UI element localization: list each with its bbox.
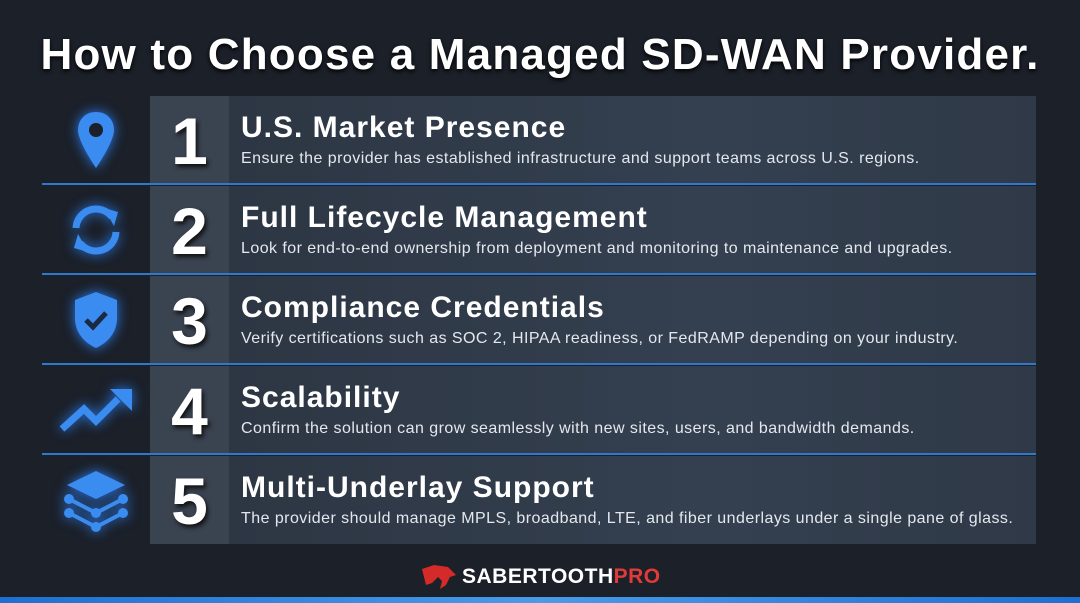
text 1: Ensure the provider has established infrastructure and support teams across U.S. regions. xyxy=(241,150,920,167)
number 2: 2 xyxy=(171,194,208,268)
bottom bar xyxy=(0,597,1080,603)
text 3: Compliance Credentials xyxy=(241,291,605,324)
number 4 xyxy=(150,366,229,454)
row 3 xyxy=(65,276,1036,363)
number 2 xyxy=(150,186,229,274)
text 4 xyxy=(229,366,1036,454)
text 2: Full Lifecycle Management xyxy=(241,201,648,234)
title: How to Choose a Managed SD-WAN Provider. xyxy=(40,30,1040,79)
number 4: 4 xyxy=(171,374,208,448)
number 1 xyxy=(150,96,229,184)
number 1: 1 xyxy=(171,104,208,178)
number 5: 5 xyxy=(171,464,208,538)
row 1 xyxy=(69,96,1036,183)
icon: sabertooth head xyxy=(422,565,456,589)
text 2 xyxy=(229,186,1036,274)
text 5: The provider should manage MPLS, broadband, LTE, and fiber underlays under a single pane of glass. xyxy=(241,510,1013,527)
text 1: U.S. Market Presence xyxy=(241,111,566,144)
number 5 xyxy=(150,456,229,544)
number 3 xyxy=(150,276,229,364)
icon: trend arrow xyxy=(54,380,142,438)
icon: layers xyxy=(56,463,136,540)
row 4 xyxy=(54,366,1036,453)
text 5: Multi-Underlay Support xyxy=(241,471,595,504)
text 5 xyxy=(229,456,1036,544)
row 2 xyxy=(65,186,1036,273)
logo: SABERTOOTHPRO xyxy=(462,565,661,588)
text 3 xyxy=(229,276,1036,364)
text 2: Look for end-to-end ownership from deployment and monitoring to maintenance and upgrades. xyxy=(241,240,953,257)
text 4: Scalability xyxy=(241,381,400,414)
icon: shield xyxy=(65,284,127,356)
text 1 xyxy=(229,96,1036,184)
icon: refresh xyxy=(65,196,127,264)
text 3: Verify certifications such as SOC 2, HIPAA readiness, or FedRAMP depending on your industry. xyxy=(241,330,958,347)
row 5 xyxy=(56,456,1036,544)
icon: location pin xyxy=(69,103,123,174)
number 3: 3 xyxy=(171,284,208,358)
text 4: Confirm the solution can grow seamlessly with new sites, users, and bandwidth demands. xyxy=(241,420,915,437)
